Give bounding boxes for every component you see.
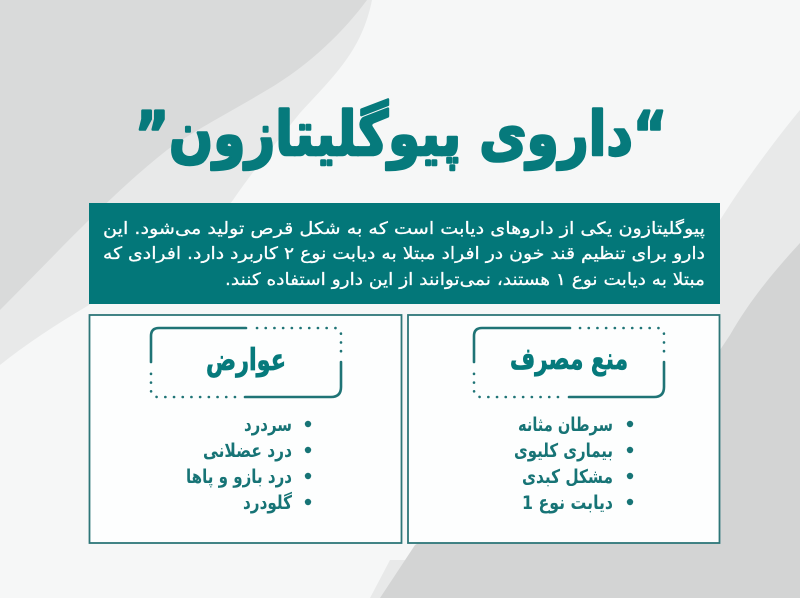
- list: سردرد: [244, 414, 292, 436]
- list: درد بازو و پاها: [186, 466, 292, 488]
- list: [514, 414, 633, 514]
- list: گلودرد: [243, 491, 293, 514]
- title: “داروی پیوگلیتازون”: [135, 99, 667, 170]
- heading frame: [151, 328, 341, 397]
- intro line 2: دارو برای تنظیم قند خون در افراد مبتلا به دیابت نوع ۲ کاربرد دارد. افرادی که: [103, 244, 705, 264]
- heading frame: [474, 328, 664, 397]
- list: [186, 414, 311, 514]
- heading: عوارض: [206, 343, 286, 378]
- intro line 3: مبتلا به دیابت نوع ۱ هستند، نمی‌توانند از این دارو استفاده کنند.: [225, 270, 705, 290]
- panel: contraindications: [408, 315, 720, 543]
- list: مشکل کبدی: [522, 466, 613, 488]
- panel: intro text: [89, 203, 720, 304]
- heading: منع مصرف: [510, 342, 628, 377]
- list: بیماری کلیوی: [514, 440, 613, 462]
- list: درد عضلانی: [203, 440, 292, 462]
- intro line 1: پیوگلیتازون یکی از داروهای دیابت است که به شکل قرص تولید می‌شود. این: [103, 218, 705, 239]
- panel: side effects: [90, 315, 402, 543]
- list: سرطان مثانه: [518, 414, 613, 436]
- list: دیابت نوع 1: [522, 492, 613, 514]
